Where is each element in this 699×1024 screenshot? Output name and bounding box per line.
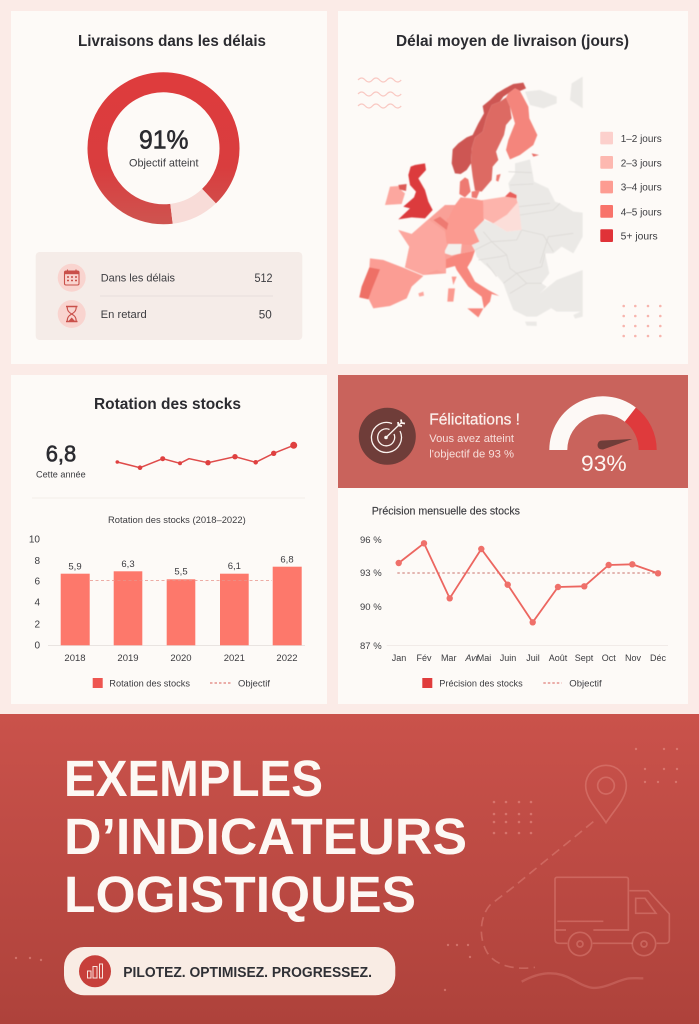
main title: LOGISTIQUES [64,866,416,923]
line chart: Sept [575,653,594,663]
line chart: Déc [650,653,666,663]
congratulations text: Vous avez atteint [429,433,514,445]
bar chart legend: Rotation des stocks [109,678,190,690]
line chart legend: Précision des stocks [439,678,523,690]
line chart: Avr [464,653,480,663]
heading: map: Délai moyen de livraison (jours) [396,33,629,50]
tagline: PILOTEZ. OPTIMISEZ. PROGRESSEZ. [123,965,372,981]
icon: hourglass [58,300,86,328]
map legend: 1–2 jours [621,134,662,145]
panel: stock accuracy [338,375,688,704]
donut chart [98,82,230,214]
current value: 6,8 [46,441,76,467]
icon: target [359,408,416,465]
bar chart: 5,9 [68,562,82,572]
label: on time: Dans les délais [101,272,175,284]
bar chart: 6 [34,576,40,588]
line chart: Août [549,653,568,663]
map legend: 2–3 jours [621,158,662,169]
bar chart: 8 [34,556,40,567]
line chart legend: Objectif [569,678,602,690]
value: on time: 512 [254,273,272,285]
value: late: 50 [259,309,272,321]
map legend [600,132,662,243]
line chart: Oct [602,653,616,663]
line chart: Mai [477,653,491,663]
icon: calendar [58,264,86,292]
line chart: Fév [416,653,432,663]
panel: on-time deliveries [11,11,327,364]
bar chart: 2020 [170,653,192,664]
heading: stock rotation: Rotation des stocks [94,396,241,413]
heading: on-time deliveries: Livraisons dans les délais [78,33,266,50]
bar chart: 2022 [276,653,298,664]
congratulations banner [338,375,688,488]
bar chart: 6,1 [228,561,241,572]
bar chart: 0 [34,640,40,652]
bar chart: 2018 [64,653,86,664]
congratulations title: Félicitations ! [429,411,520,428]
donut value: 91% [139,126,188,154]
sparkline [116,442,297,470]
decoration: waves [358,78,401,108]
line chart: 87 % [360,641,382,652]
bar chart: 6,3 [121,559,135,570]
donut caption: Objectif atteint [129,158,198,170]
icon: route, pin and truck [481,765,669,988]
line chart [360,535,668,663]
gauge: 93% [581,451,627,476]
route line [481,822,593,968]
icon: bar chart badge [79,955,111,987]
panel: stock rotation [11,375,327,704]
bar chart: 4 [34,598,40,608]
label: late: En retard [101,309,147,321]
line chart: 93 % [360,568,382,579]
bar chart: 5,5 [174,566,188,578]
stats box [36,252,302,340]
map legend: 4–5 jours [621,207,662,218]
map legend: 3–4 jours [621,183,662,194]
bar chart: 10 [29,534,40,546]
main title: EXEMPLES [64,750,323,807]
gauge [558,405,648,476]
tagline pill [64,947,395,995]
icon: truck [555,877,669,956]
line chart: Juin [500,653,516,663]
bar chart: 2021 [224,653,245,664]
choropleth map of Europe [359,77,583,326]
congratulations text: l'objectif de 93 % [429,448,514,460]
bar chart: 6,8 [280,554,294,566]
bar chart: 2019 [117,653,139,664]
main title: D’INDICATEURS [64,808,467,865]
current value caption: Cette année [36,470,86,480]
line chart legend [422,678,602,690]
line chart: 96 % [360,535,382,546]
main title [64,750,467,923]
panel: title banner [0,714,699,1024]
decoration: dots [15,748,678,991]
line chart: Nov [625,653,641,663]
panel: delivery time map [338,11,688,364]
line chart: Juil [526,653,540,663]
congratulations text [429,433,514,460]
bar chart heading: Rotation des stocks (2018–2022) [108,515,246,526]
line chart: 90 % [360,602,382,613]
bar chart [29,534,305,664]
bar chart: 2 [34,620,40,630]
line chart heading: Précision mensuelle des stocks [372,506,521,518]
icon: location pin [586,765,626,823]
line chart: Mar [441,653,456,663]
map legend: 5+ jours [621,232,658,243]
bar chart legend: Objectif [238,678,270,690]
line chart: Jan [392,653,406,663]
bar chart legend [93,678,270,690]
decoration: dots [622,305,662,337]
